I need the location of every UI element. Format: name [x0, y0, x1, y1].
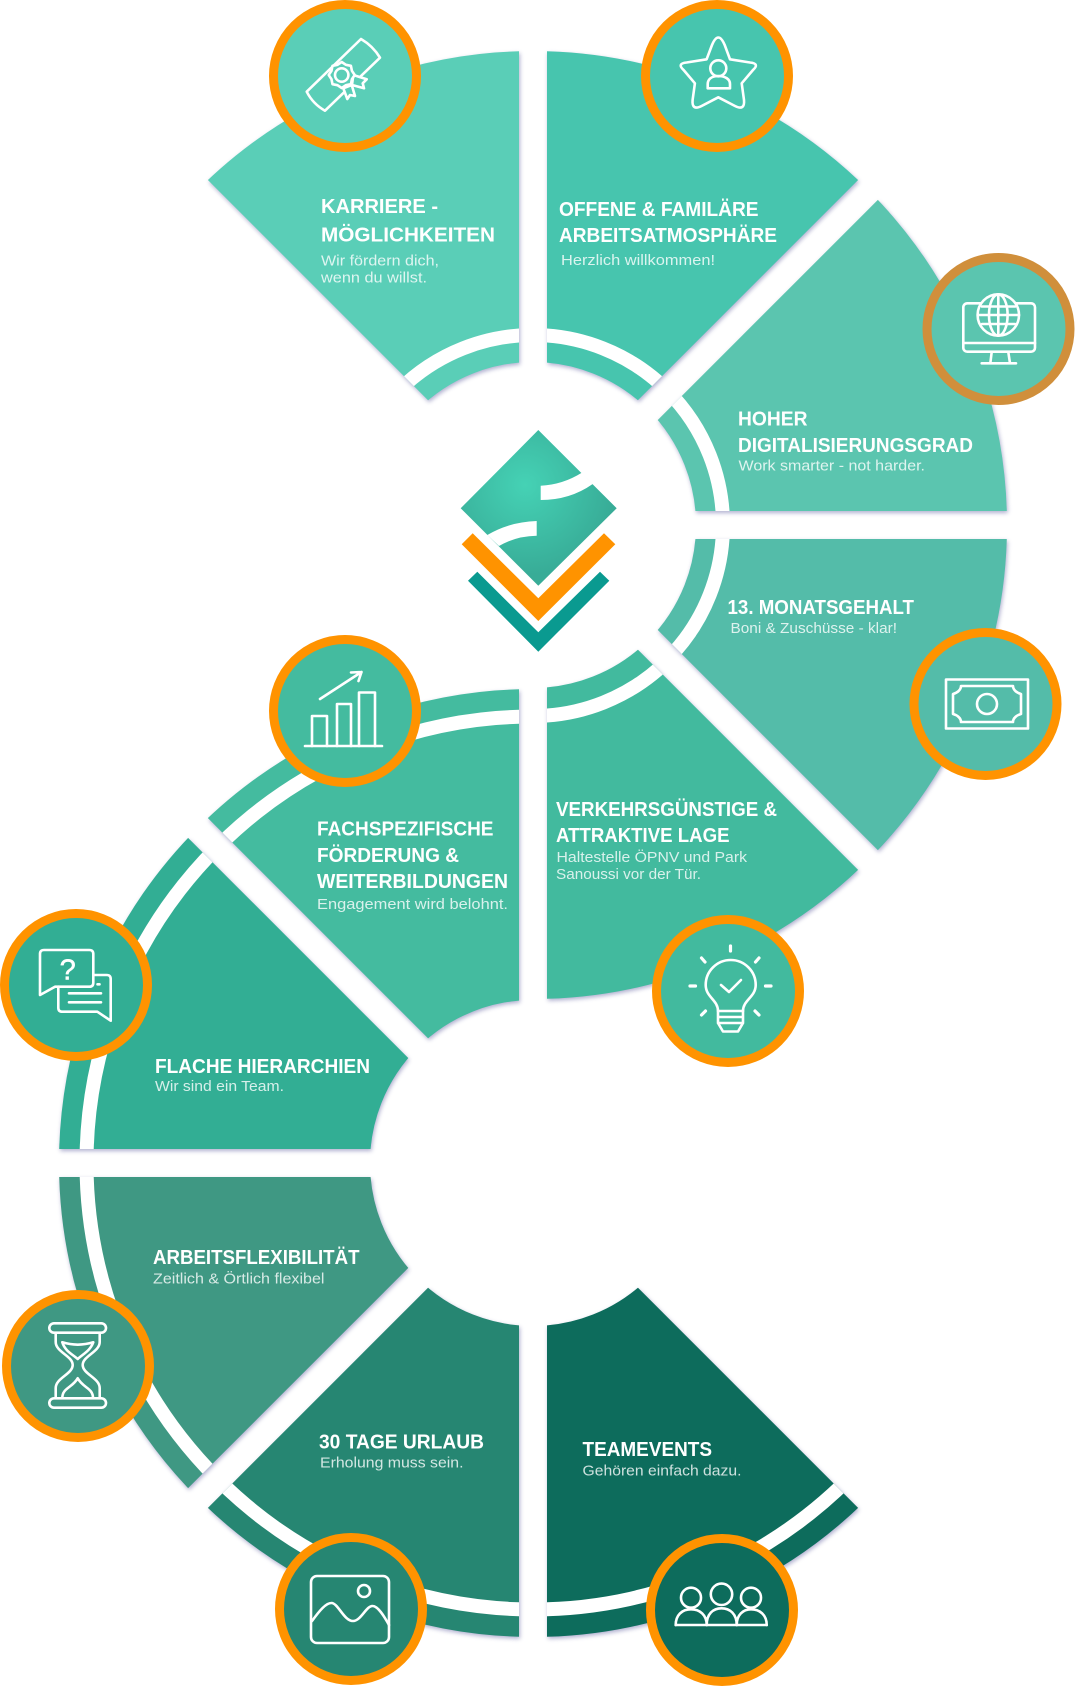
panel: Verkehrsgünstige & attraktive Lage	[546, 650, 860, 1067]
text: Arbeitsflexibilität subtitle: Zeitlich & Örtlich flexibel	[153, 1270, 324, 1288]
wedge: Offene	[546, 51, 860, 404]
heading: Flache: FLACHE HIERARCHIEN	[155, 1056, 370, 1078]
text: Karriere subtitle	[320, 252, 439, 286]
heading: Teamevents: TEAMEVENTS	[582, 1439, 712, 1461]
text: Offene subtitle: Herzlich willkommen!	[561, 252, 715, 269]
panel: 13. Monatsgehalt	[658, 538, 1062, 854]
wedge: Urlaub	[208, 1288, 522, 1641]
wedge: Karriere	[208, 51, 522, 404]
panel: Hoher Digitalisierungsgrad	[658, 200, 1074, 516]
heading: Offene	[559, 198, 777, 247]
heading: Fachspezifisch	[317, 818, 508, 893]
icon: monitor with globe	[927, 258, 1070, 400]
wedge: Flache	[58, 838, 410, 1154]
panel: Flache Hierarchien	[0, 838, 410, 1154]
heading: Hoher: HOHER	[738, 408, 808, 430]
heading: Karriere	[321, 196, 495, 246]
heading: Urlaub: 30 TAGE URLAUB	[319, 1432, 484, 1454]
text: Monatsgehalt subtitle: Boni & Zuschüsse - klar!	[730, 620, 897, 637]
logo: lower stripe	[487, 521, 537, 546]
icon: chat bubbles: ?	[60, 954, 76, 986]
wedge: Teamevents	[546, 1288, 860, 1641]
panel: 30 Tage Urlaub	[208, 1288, 522, 1685]
text: Verkehr subtitle	[556, 848, 748, 883]
icon: chat bubbles	[4, 914, 148, 1056]
heading: Arbeitsflexibilität: ARBEITSFLEXIBILITÄT	[153, 1246, 360, 1269]
wedge: Verkehr	[546, 650, 860, 1003]
text: Hoher subtitle: Work smarter - not harder.	[738, 458, 925, 474]
icon: light bulb with check	[656, 920, 800, 1062]
logo: teal chevron	[468, 572, 609, 652]
panel: Karriere-Möglichkeiten	[208, 0, 522, 404]
icon: rising bar chart	[274, 640, 416, 782]
logo: upper stripe	[541, 473, 593, 500]
heading: Offene: ARBEITSATMOSPHÄRE	[559, 224, 777, 247]
logo: diamond	[461, 430, 617, 586]
heading: Verkehr: VERKEHRSGÜNSTIGE &	[556, 798, 777, 821]
wedge: Fachspezifisch	[208, 689, 522, 1042]
heading: Fachspezifisch: FACHSPEZIFISCHE	[317, 818, 494, 840]
icon: landscape picture	[280, 1538, 422, 1680]
text: Flache subtitle: Wir sind ein Team.	[155, 1078, 284, 1095]
heading: Fachspezifisch: WEITERBILDUNGEN	[317, 871, 508, 893]
text: Fachspezifisch subtitle: Engagement wird belohnt.	[317, 896, 508, 913]
logo	[461, 430, 617, 652]
text: Urlaub subtitle: Erholung muss sein.	[320, 1454, 464, 1472]
icon: hourglass	[6, 1294, 150, 1438]
heading: Hoher: DIGITALISIERUNGSGRAD	[738, 435, 973, 457]
heading: Verkehr: ATTRAKTIVE LAGE	[556, 825, 730, 847]
text: Karriere subtitle: wenn du willst.	[320, 270, 427, 286]
text: Verkehr subtitle: Sanoussi vor der Tür.	[556, 866, 701, 883]
heading: Monatsgehalt: 13. MONATSGEHALT	[728, 597, 914, 619]
heading: Hoher	[738, 408, 973, 457]
heading: Karriere: MÖGLICHKEITEN	[321, 224, 495, 246]
heading: Offene: OFFENE & FAMILÄRE	[559, 198, 758, 221]
text: Teamevents subtitle: Gehören einfach dazu.	[582, 1462, 742, 1480]
panel: Arbeitsflexibilität	[2, 1176, 410, 1492]
icon: group of people	[650, 1538, 794, 1682]
panel: Teamevents	[546, 1288, 860, 1686]
text: Verkehr subtitle: Haltestelle ÖPNV und Park	[556, 848, 748, 866]
heading: Karriere: KARRIERE -	[321, 196, 438, 218]
heading: Fachspezifisch: FÖRDERUNG &	[317, 844, 459, 867]
logo: orange chevron	[462, 533, 615, 621]
panel: Fachspezifische Förderung & Weiterbildungen	[208, 635, 522, 1042]
icon: diploma scroll	[274, 4, 416, 148]
wedge: Hoher	[658, 200, 1010, 516]
panel: Offene & familäre Arbeitsatmosphäre	[546, 0, 860, 404]
text: Karriere subtitle: Wir fördern dich,	[321, 252, 439, 270]
icon: star with person	[646, 4, 788, 148]
wedge: Arbeitsflexibilität	[58, 1176, 410, 1492]
wedge: Monatsgehalt	[658, 538, 1010, 854]
icon: banknote	[914, 632, 1057, 776]
heading: Verkehr	[556, 798, 777, 847]
